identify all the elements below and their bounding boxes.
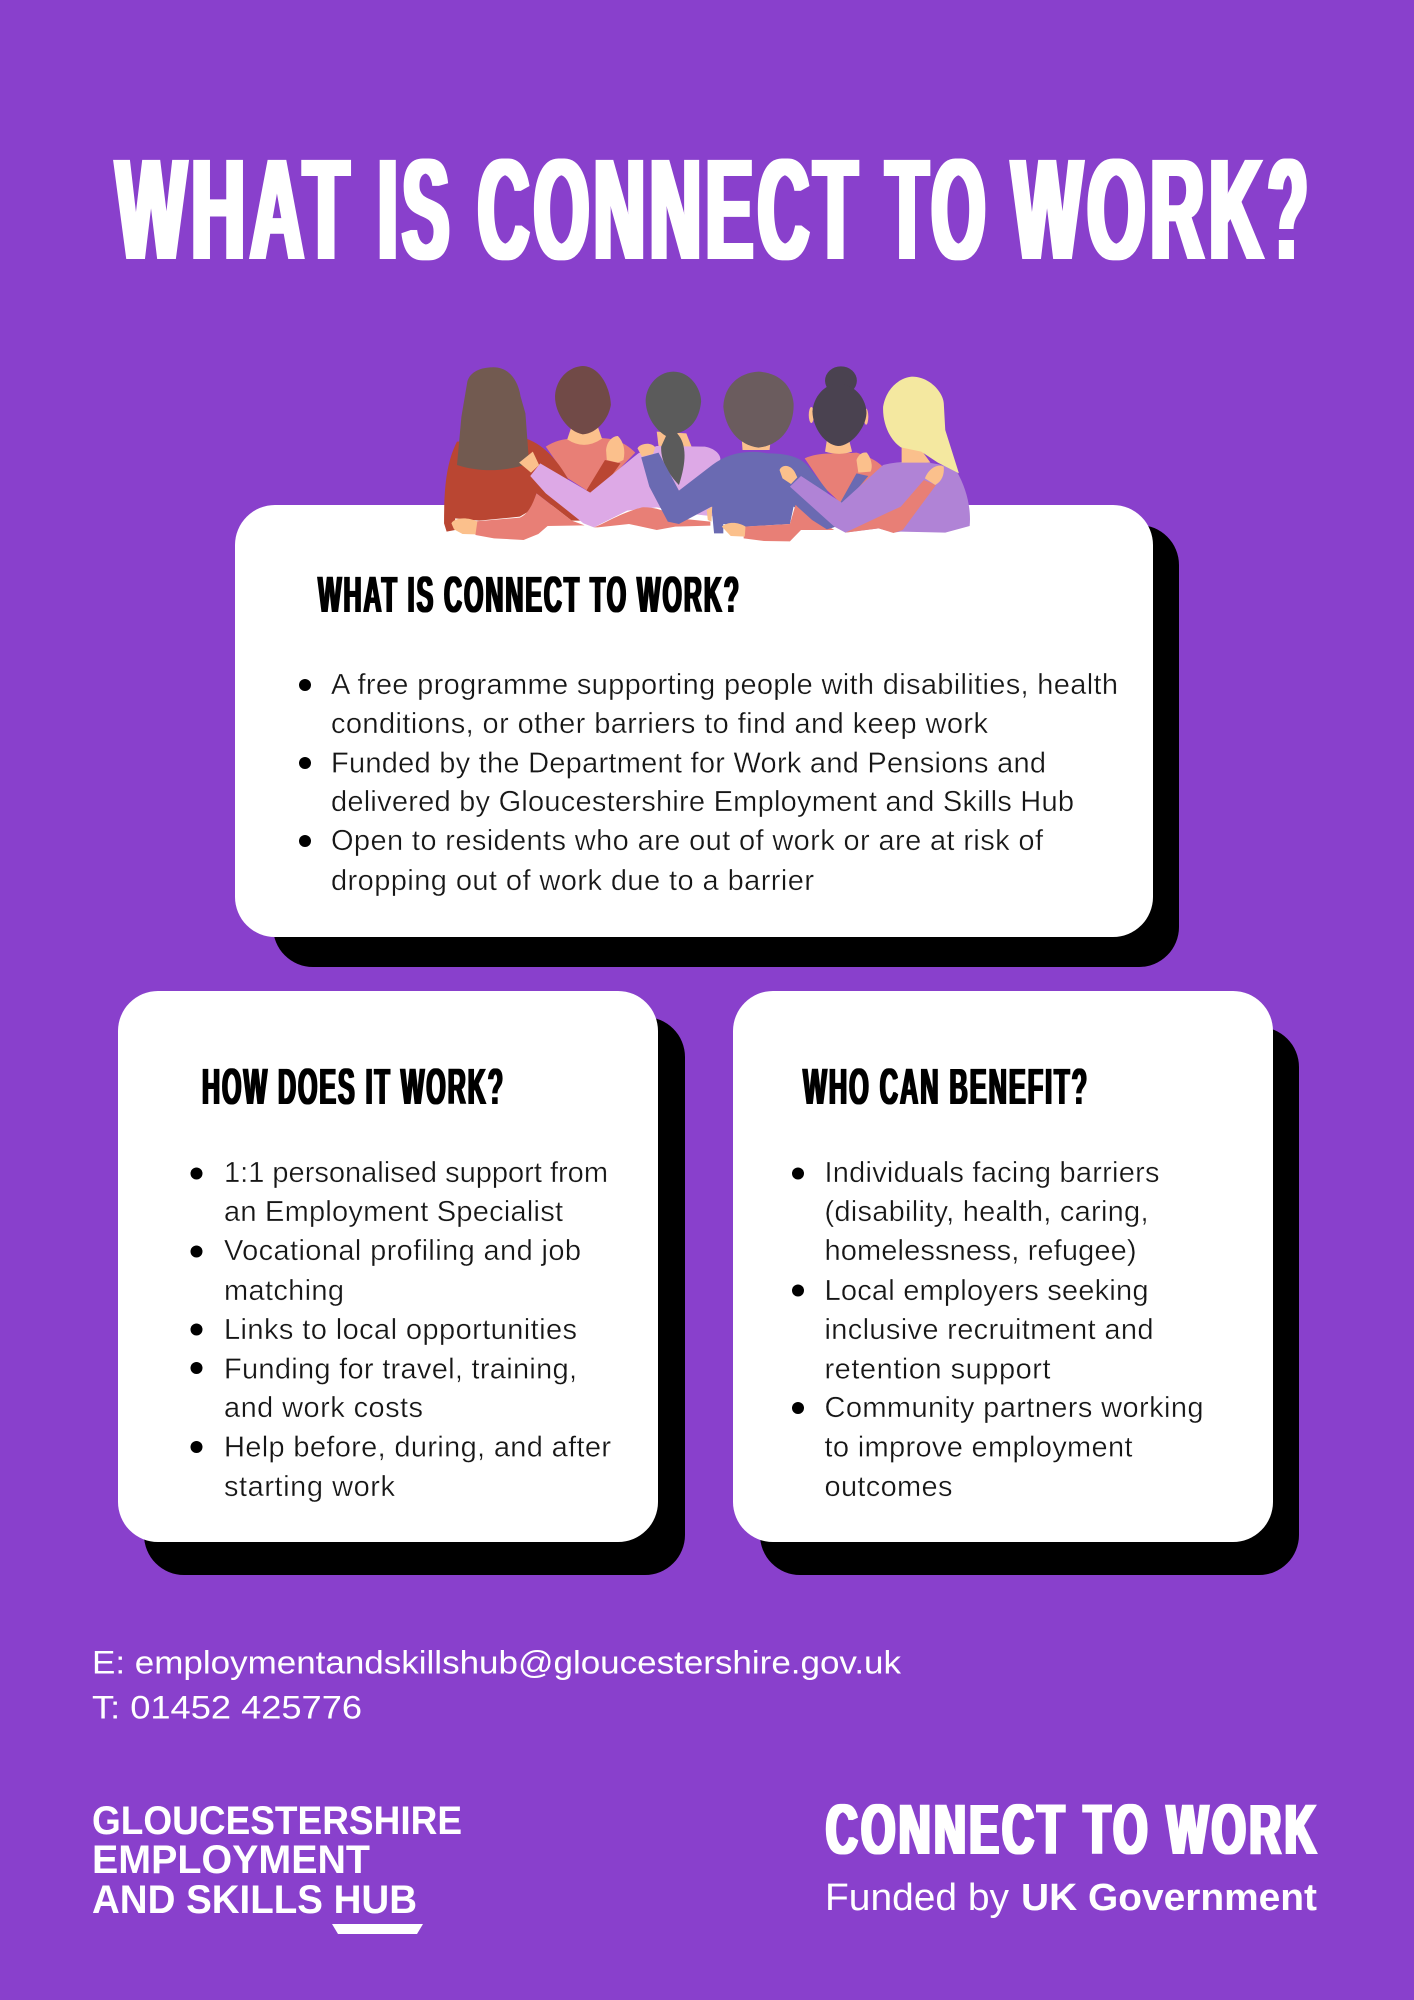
person 5: salmon sweater, dark hair in a bun — [805, 366, 883, 504]
bullet list: who can benefit: Community partners working — [824, 1392, 1204, 1424]
bullet list: how does it work: 1:1 personalised support from — [224, 1157, 608, 1189]
logo: gloucestershire employment and skills hub: GLOUCESTERSHIRE — [92, 1799, 462, 1843]
panel card: who can benefit — [733, 991, 1273, 1542]
bullet list: how does it work: Links to local opportunities — [224, 1314, 577, 1346]
bullet list: who can benefit: to improve employment — [824, 1432, 1132, 1464]
panel: how does it work — [118, 991, 685, 1575]
title — [116, 129, 1312, 290]
bullet list: who can benefit: retention support — [824, 1354, 1050, 1386]
bullet list: how does it work: Vocational profiling and job — [224, 1235, 581, 1267]
bullet list: who can benefit — [792, 1157, 1204, 1503]
bullet list: who can benefit: Individuals facing barriers — [824, 1157, 1160, 1189]
logo: connect to work, funded by UK Government: UK Government — [1021, 1877, 1317, 1919]
title: IS — [378, 129, 454, 290]
panel: who can benefit: WHO CAN BENEFIT? — [803, 1058, 1089, 1115]
bullet list: who can benefit: homelessness, refugee) — [824, 1235, 1136, 1267]
bullet list: main: conditions, or other barriers to find and keep work — [331, 708, 988, 740]
panel: what is connect to work: WHAT IS CONNECT TO WORK? — [318, 566, 741, 623]
panel shadow: main — [273, 525, 1179, 967]
bullet list: main: A free programme supporting people with disabilities, health — [331, 669, 1118, 701]
illustration: group of six friends hugging — [444, 366, 970, 541]
bullet list: main: delivered by Gloucestershire Employment and Skills Hub — [331, 786, 1074, 818]
person 3: lilac sweater, grey ponytail — [519, 372, 720, 527]
contact details — [92, 1644, 902, 1726]
logo: gloucestershire employment and skills hub: AND SKILLS HUB — [92, 1878, 417, 1922]
bullet list: who can benefit: (disability, health, caring, — [824, 1196, 1148, 1228]
panel card: how does it work — [118, 991, 658, 1542]
bullet list: who can benefit: inclusive recruitment and — [824, 1314, 1154, 1346]
bullet list: how does it work — [190, 1157, 611, 1503]
panel shadow: how does it work — [144, 1017, 685, 1575]
title: TO — [886, 129, 990, 290]
bullet list: how does it work: matching — [224, 1275, 344, 1307]
logo: connect to work, funded by UK Government — [825, 1791, 1320, 1919]
logo: gloucestershire employment and skills hub — [92, 1799, 462, 1934]
bullet list: main: Funded by the Department for Work and Pensions and — [331, 748, 1046, 780]
panel: who can benefit — [733, 991, 1299, 1575]
panel card: main — [235, 505, 1153, 937]
person 6: violet sweater, long blonde hair — [780, 377, 970, 533]
person 4: blue sweater, brown hair — [641, 372, 838, 541]
panel: how does it work: HOW DOES IT WORK? — [202, 1058, 505, 1115]
arm band: salmon lower sleeve — [594, 507, 710, 530]
bullet list: how does it work: an Employment Specialist — [224, 1196, 563, 1228]
title: CONNECT — [478, 129, 862, 290]
title: WHAT — [116, 129, 354, 290]
bullet list: how does it work: and work costs — [224, 1392, 423, 1424]
person 2: salmon sweater, brown hair — [546, 366, 635, 495]
panel: what is connect to work — [235, 505, 1179, 967]
contact details: E: employmentandskillshub@gloucestershire.gov.uk — [92, 1644, 902, 1680]
logo: gloucestershire employment and skills hub: EMPLOYMENT — [92, 1838, 370, 1882]
logo: connect to work, funded by UK Government: Funded by — [825, 1877, 1009, 1919]
bullet list: how does it work: Help before, during, and after — [224, 1432, 611, 1464]
person 1: red top, long brown hair — [444, 367, 585, 540]
bullet list: who can benefit: Local employers seeking — [824, 1275, 1148, 1307]
bullet list: main: dropping out of work due to a barrier — [331, 865, 814, 897]
text: ? — [1268, 129, 1312, 290]
bullet list: main: Open to residents who are out of work or are at risk of — [331, 825, 1044, 857]
contact details: T: 01452 425776 — [92, 1690, 362, 1726]
bullet list: who can benefit: outcomes — [824, 1471, 952, 1503]
bullet list: main — [299, 669, 1118, 897]
panel shadow: who can benefit — [760, 1027, 1299, 1575]
bullet list: how does it work: Funding for travel, training, — [224, 1354, 577, 1386]
bullet list: how does it work: starting work — [224, 1471, 396, 1503]
